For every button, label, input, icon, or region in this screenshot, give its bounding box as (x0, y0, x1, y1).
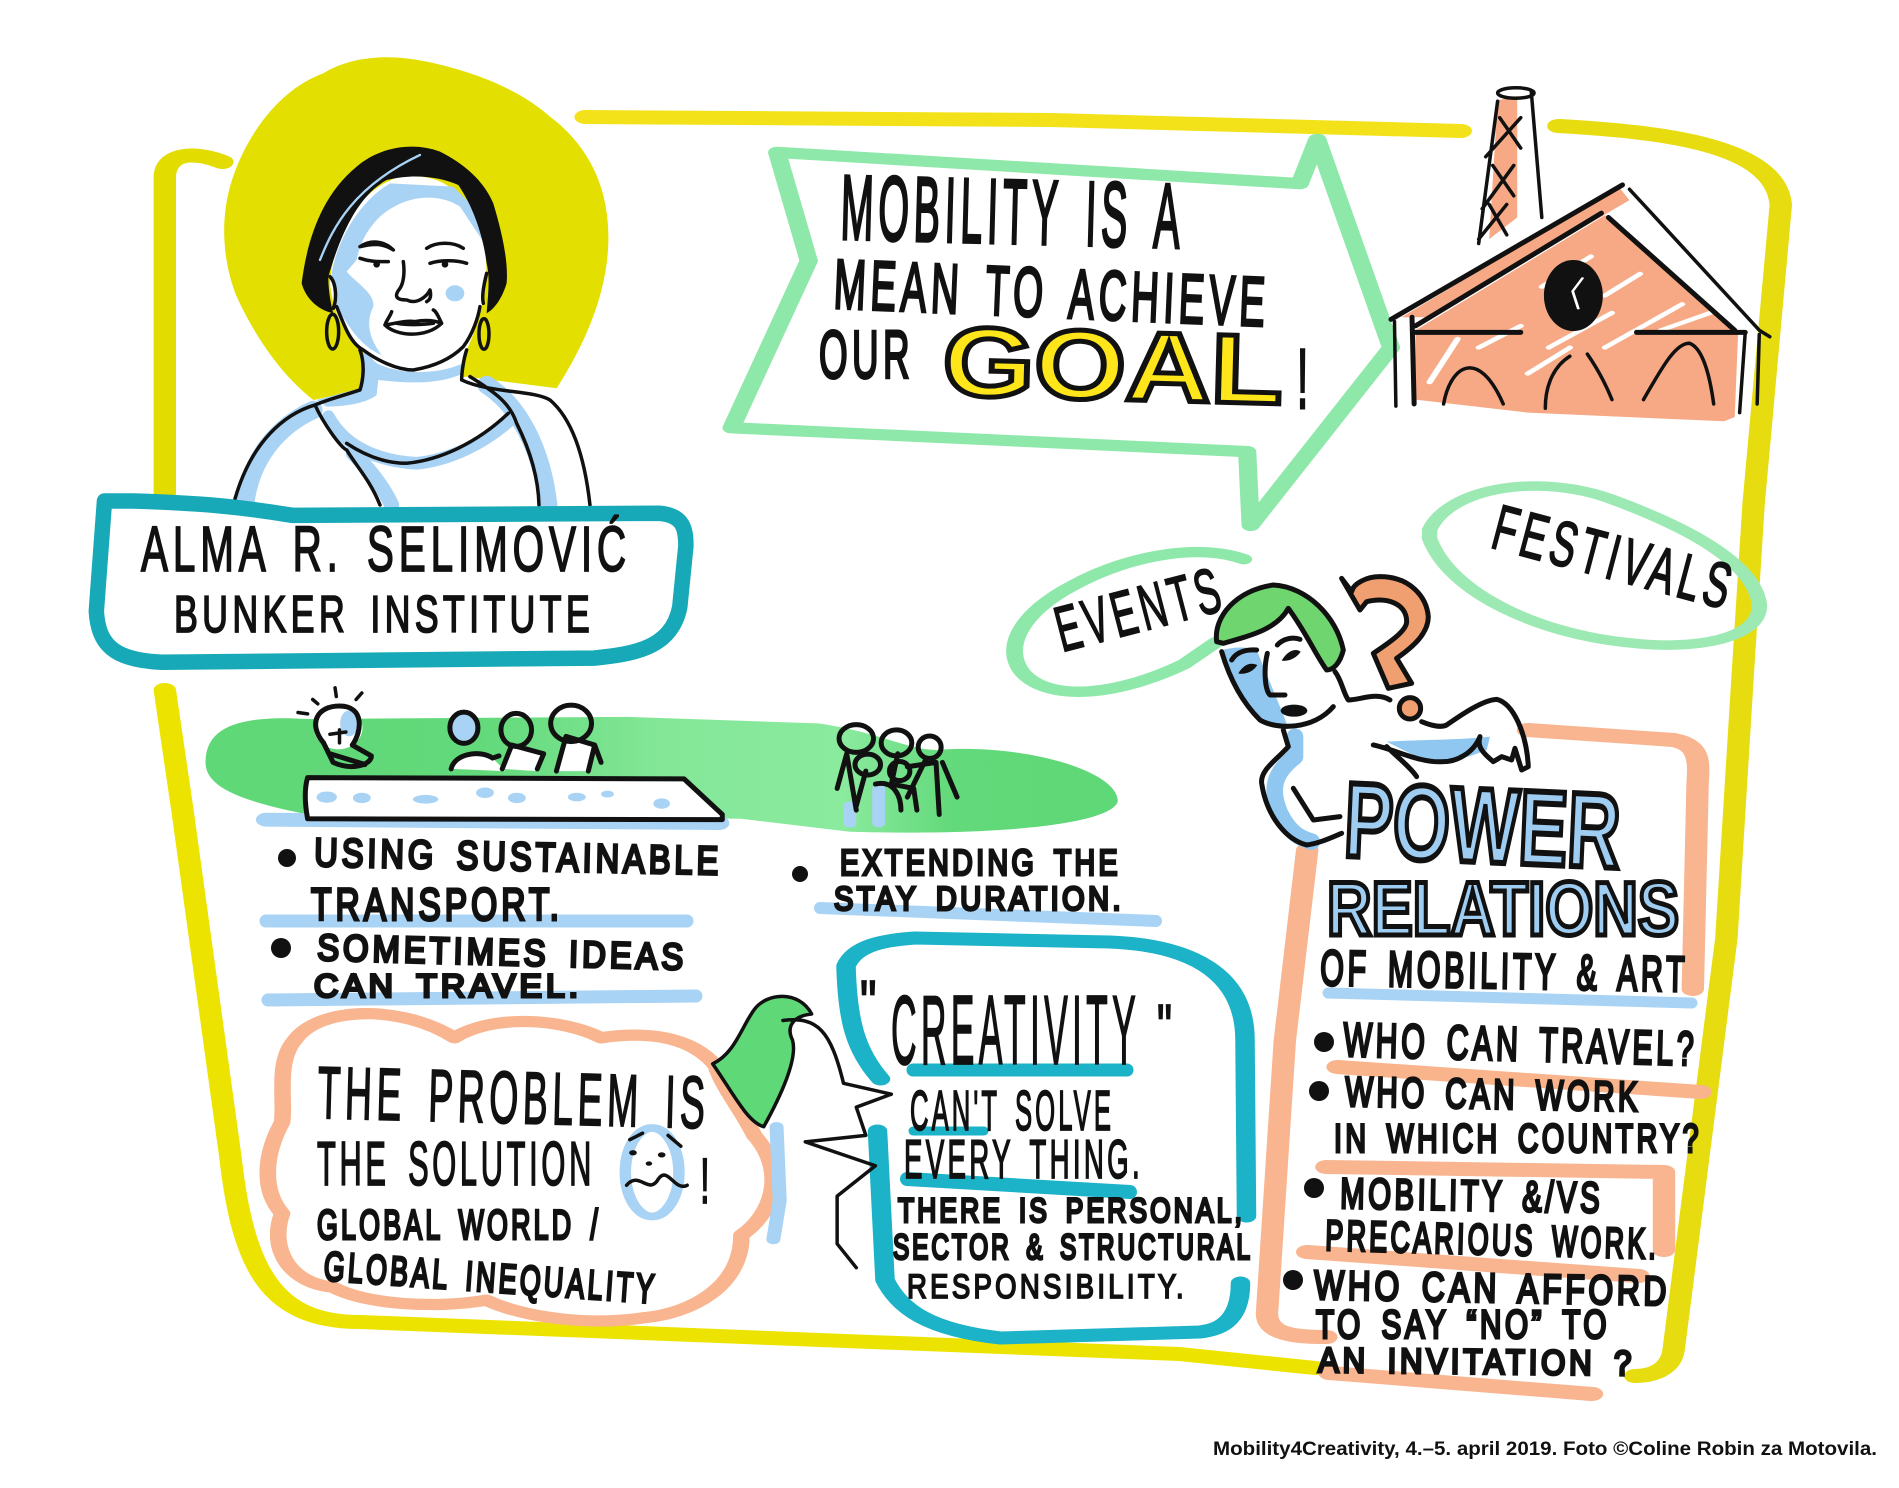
cloud: the problem is the solution: THE SOLUTION (317, 1130, 595, 1199)
question list: WHO CAN TRAVEL? (1343, 1014, 1698, 1076)
oval tag: Festivals (1430, 486, 1759, 645)
speech bubble: creativity can't solve everything: " (860, 969, 882, 1038)
oval tag: Events: EVENTS (1047, 553, 1232, 666)
caption: photo credit: Mobility4Creativity, 4.–5. april 2019. Foto ©Coline Robin za Motovila. (1213, 1439, 1877, 1460)
cloud: the problem is the solution: GLOBAL INEQUALITY (322, 1243, 659, 1312)
heading: power: POWER (1342, 761, 1623, 891)
speech bubble: creativity can't solve everything: EVERY THING. (904, 1128, 1143, 1190)
question list: IN WHICH COUNTRY? (1334, 1117, 1702, 1161)
text block: transport bullets: TRANSPORT. (311, 879, 563, 930)
cloud: the problem is the solution: ! (700, 1145, 714, 1217)
text block: transport bullets: USING SUSTAINABLE (314, 831, 723, 884)
speech bubble: creativity can't solve everything: THERE IS PERSONAL, (898, 1192, 1245, 1230)
name box: teal frame with speaker name and institute: ALMA R. SELIMOVIĆ (141, 513, 631, 585)
speech bubble: creativity can't solve everything: SECTOR & STRUCTURAL (893, 1228, 1253, 1267)
heading: relations: RELATIONS (1327, 867, 1679, 952)
arrow banner: Mobility is a mean to achieve our goal: OUR (819, 317, 914, 393)
text block: transport bullets: CAN TRAVEL. (314, 968, 582, 1004)
arrow banner: Mobility is a mean to achieve our goal: ! (1297, 332, 1313, 426)
name box: teal frame with speaker name and institute: BUNKER INSTITUTE (174, 586, 594, 644)
arrow banner: Mobility is a mean to achieve our goal (732, 139, 1391, 525)
green band with train and groups of people (206, 688, 1118, 833)
question list: PRECARIOUS WORK. (1325, 1212, 1660, 1269)
text block: extending the stay duration: EXTENDING THE (840, 842, 1121, 883)
portrait: Alma R. Selimovic with yellow halo (224, 57, 608, 505)
icon: wavy-mouth face (625, 1128, 687, 1216)
text block: transport bullets (266, 831, 723, 1004)
arrow banner: Mobility is a mean to achieve our goal: MOBILITY IS A (839, 157, 1186, 268)
blue underline (1328, 993, 1692, 1003)
figure: person with green hair wondering, question mark (1216, 577, 1528, 845)
icon: three travellers (450, 705, 601, 771)
question list: MOBILITY &/VS (1340, 1170, 1604, 1223)
speech bubble: creativity can't solve everything (846, 938, 1253, 1338)
arrow banner: Mobility is a mean to achieve our goal: GOAL (941, 306, 1284, 425)
question list: AN INVITATION ? (1318, 1341, 1635, 1383)
oval tag: Events (1015, 552, 1244, 692)
text block: extending the stay duration: STAY DURATION. (834, 880, 1124, 917)
orange frame around power relations panel (1267, 730, 1701, 1394)
text block: extending the stay duration (792, 842, 1156, 921)
text block: transport bullets: SOMETIMES IDEAS (317, 927, 688, 978)
speech bubble: creativity can't solve everything: CREATIVITY (891, 975, 1140, 1085)
yellow hand-drawn frame (165, 117, 1781, 1376)
figure: profile head with green hair (713, 996, 891, 1268)
question list: TO SAY “NO” TO (1316, 1303, 1610, 1347)
name box: teal frame with speaker name and institute (96, 501, 686, 662)
cloud: the problem is the solution: GLOBAL WORLD / (317, 1201, 601, 1248)
question list: WHO CAN AFFORD (1314, 1262, 1671, 1314)
speech bubble: creativity can't solve everything: CAN'T SOLVE (910, 1079, 1114, 1143)
icon: light bulb (298, 688, 371, 766)
arrow banner: Mobility is a mean to achieve our goal: MEAN TO ACHIEVE (832, 245, 1271, 341)
cloud: the problem is the solution: THE PROBLEM IS (317, 1051, 711, 1144)
oval tag: Festivals: FESTIVALS (1485, 491, 1744, 624)
icon: train (305, 778, 722, 820)
panel: power relations of mobility and art (1283, 761, 1702, 1383)
speech bubble: creativity can't solve everything: " (1157, 993, 1177, 1062)
question list: WHO CAN WORK (1345, 1068, 1642, 1120)
cloud: the problem is the solution (268, 1014, 773, 1321)
icon: family group (837, 725, 957, 823)
speech bubble: creativity can't solve everything: RESPONSIBILITY. (907, 1268, 1187, 1306)
icon: factory building with chimney (1391, 88, 1770, 421)
question list (1283, 1014, 1702, 1383)
